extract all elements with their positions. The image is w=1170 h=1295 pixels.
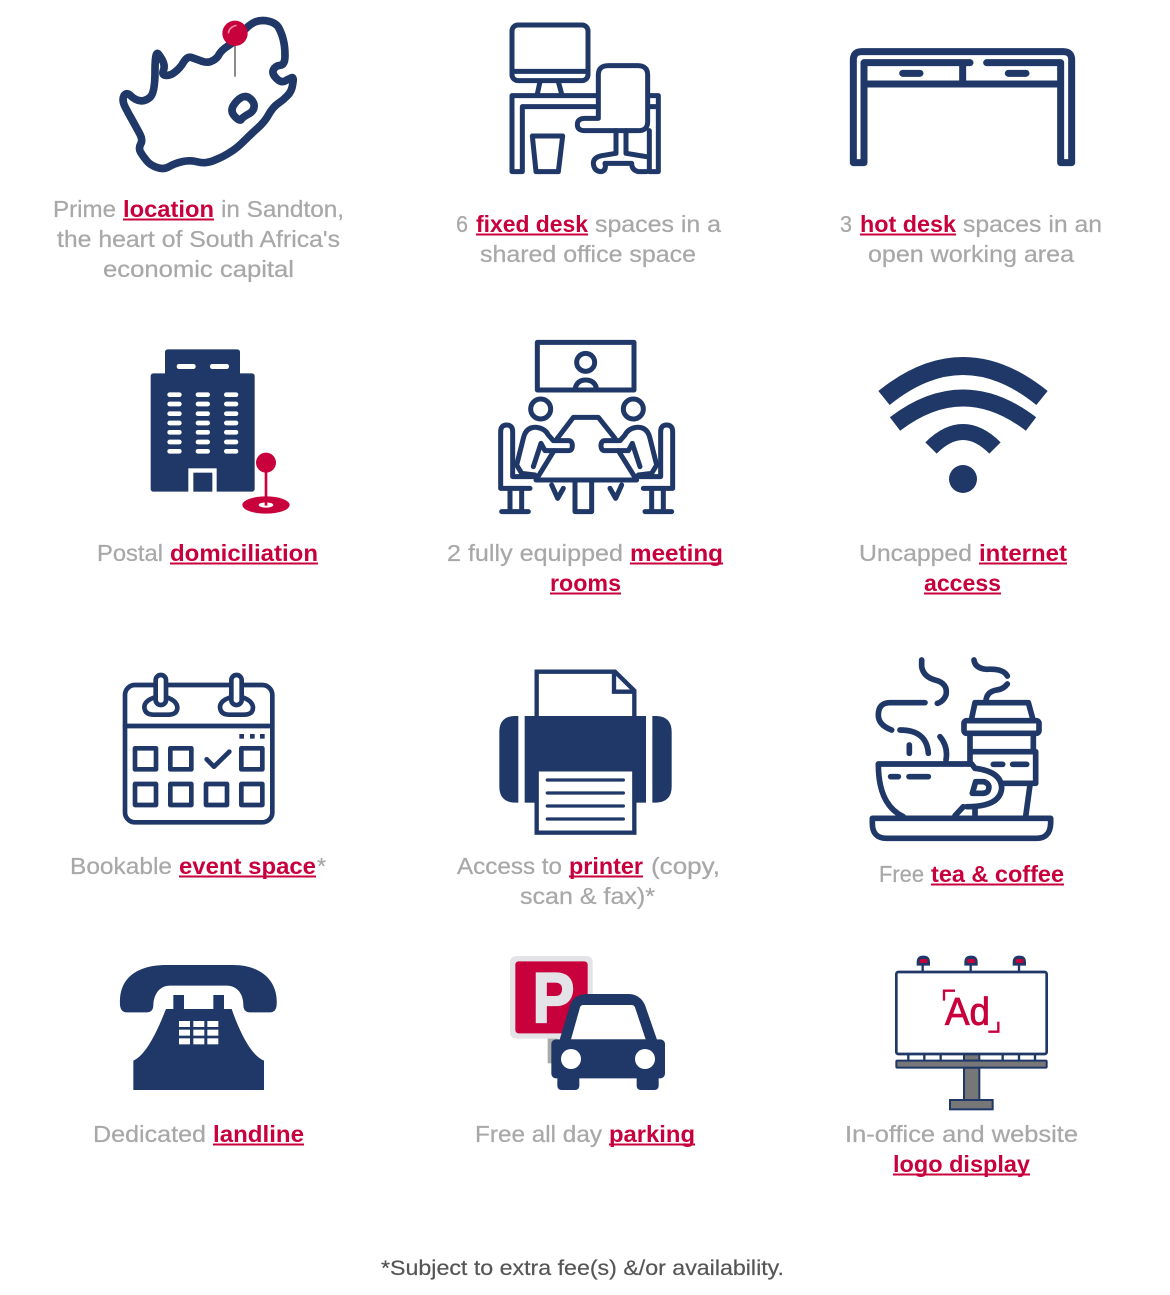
panel: internet (859, 366, 1067, 596)
text: fixed desk caption (456, 211, 721, 267)
text: hot desk caption: 3 (840, 211, 852, 237)
text: location caption: location (123, 196, 214, 222)
text: internet caption (859, 540, 1067, 596)
panel: hot desk (840, 52, 1102, 267)
text: fixed desk caption: spaces in a (595, 211, 721, 237)
text: parking caption: parking (609, 1121, 695, 1147)
icon: billboard (896, 956, 1047, 1109)
text: tea and coffee caption: tea & coffee (931, 861, 1064, 887)
text: location caption: the heart of South Africa's (57, 226, 340, 252)
text: landline caption: Dedicated (93, 1121, 206, 1147)
text: hot desk caption (840, 211, 1102, 267)
text: landline caption (93, 1121, 304, 1147)
text: meeting rooms caption (447, 540, 723, 596)
text: printer caption (457, 853, 720, 909)
text: meeting rooms caption: rooms (550, 570, 621, 596)
icon: calendar (125, 675, 272, 822)
text: parking caption: Free all day (475, 1121, 603, 1147)
icon: parking sign and car (510, 956, 665, 1090)
text: tea and coffee caption: Free (879, 861, 924, 887)
text: location caption: in Sandton, (221, 196, 344, 222)
text: fixed desk caption: 6 (456, 211, 468, 237)
text: parking caption (475, 1121, 695, 1147)
panel: meeting rooms (447, 342, 723, 596)
icon: wifi (884, 366, 1042, 493)
text: event space caption: * (317, 853, 326, 879)
icon: meeting table with video screen (501, 342, 673, 512)
text: meeting rooms caption: meeting (630, 540, 723, 566)
icon: desk with monitor and chair (512, 25, 658, 172)
text: hot desk caption: spaces in an (963, 211, 1102, 237)
icon: cup and takeaway coffee (872, 660, 1051, 838)
panel: logo display (845, 956, 1078, 1177)
icon: office building with location pin (151, 349, 290, 514)
text: hot desk caption: open working area (868, 241, 1074, 267)
text: domiciliation caption: domiciliation (170, 540, 318, 566)
icon: printer (499, 672, 672, 833)
icon: telephone (120, 965, 277, 1090)
text: fixed desk caption: fixed desk (476, 211, 588, 237)
text: logo display caption: logo display (893, 1151, 1030, 1177)
panel: tea and coffee (872, 660, 1064, 887)
text: domiciliation caption (97, 540, 318, 566)
text: event space caption: Bookable (70, 853, 172, 879)
panel: domiciliation (97, 349, 318, 566)
icon: South Africa map with pin (123, 20, 293, 169)
text: printer caption: printer (569, 853, 643, 879)
text: location caption (53, 196, 344, 282)
text: event space caption (70, 853, 326, 879)
icon: long desk (853, 52, 1072, 163)
icon: billboard: Ad (945, 991, 990, 1034)
text: logo display caption (845, 1121, 1078, 1177)
footnote: *Subject to extra fee(s) &/or availability. (381, 1257, 784, 1280)
text: printer caption: scan & fax)* (520, 883, 655, 909)
text: landline caption: landline (213, 1121, 304, 1147)
panel: location (53, 20, 344, 282)
text: domiciliation caption: Postal (97, 540, 163, 566)
text: meeting rooms caption: 2 fully equipped (447, 540, 623, 566)
panel: fixed desk (456, 25, 721, 267)
panel: event space (70, 675, 326, 879)
panel: parking (475, 956, 695, 1147)
text: logo display caption: In-office and website (845, 1121, 1078, 1147)
text: location caption: economic capital (103, 256, 294, 282)
text: internet caption: access (924, 570, 1001, 596)
text: internet caption: internet (979, 540, 1067, 566)
text: internet caption: Uncapped (859, 540, 972, 566)
text: fixed desk caption: shared office space (480, 241, 696, 267)
icon: parking sign and car: P (533, 958, 574, 1037)
panel: printer (457, 672, 720, 909)
text: event space caption: event space (179, 853, 316, 879)
text: printer caption: Access to (457, 853, 562, 879)
text: location caption: Prime (53, 196, 116, 222)
text: hot desk caption: hot desk (860, 211, 956, 237)
text: printer caption: (copy, (651, 853, 720, 879)
panel: landline (93, 965, 304, 1147)
